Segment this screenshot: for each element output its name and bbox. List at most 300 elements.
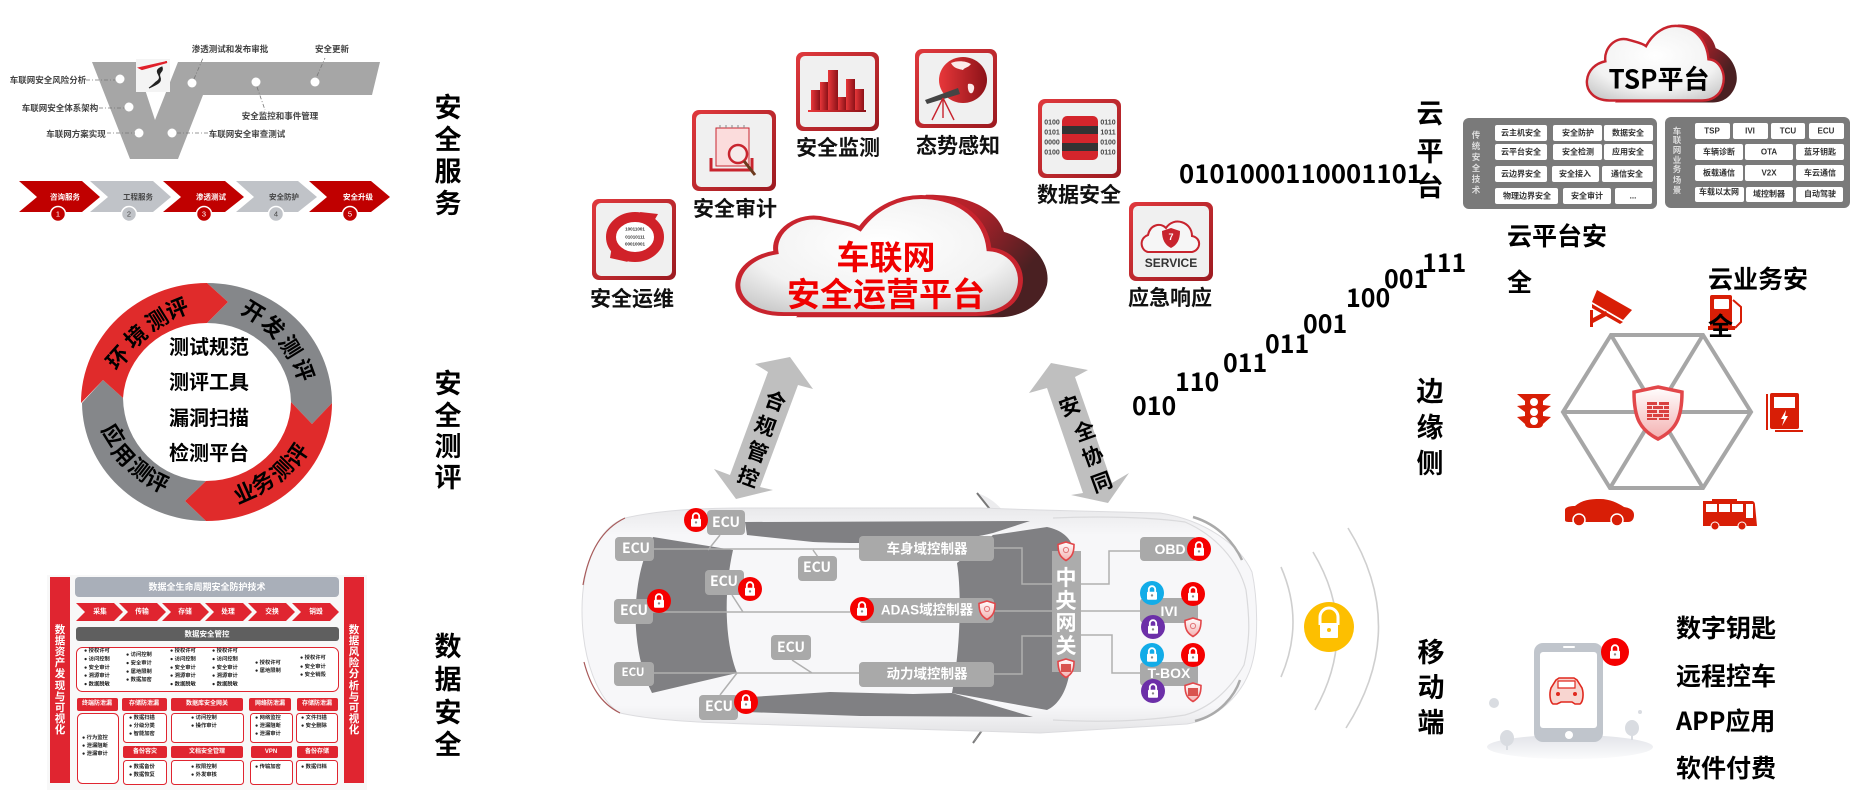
icon: database: 0100 <box>1044 120 1060 126</box>
icon: database <box>1044 116 1116 160</box>
arrow: 安全协同: 全 <box>1071 417 1099 446</box>
control list box: ● 数据加密 <box>126 675 153 683</box>
binary stream diagonal: 100 <box>1346 279 1390 315</box>
right column: 化 <box>349 723 360 736</box>
panel: 传统安全技术: 安全接入 <box>1559 168 1591 178</box>
left column: 数 <box>55 623 66 636</box>
icon: fuel pump <box>1708 295 1741 330</box>
left column: 据 <box>55 634 66 647</box>
testing ring <box>81 283 332 521</box>
ring label: 开发测评: 测 <box>274 331 306 363</box>
icon: charging station <box>1766 393 1803 432</box>
heading: 安全测评: 评 <box>434 463 462 493</box>
left column: 可 <box>55 702 65 714</box>
data security architecture panel <box>47 575 367 790</box>
heading: 边缘侧: 缘 <box>1416 413 1444 443</box>
heading: 数据安全: 据 <box>434 665 462 695</box>
label: 安全运维: 安全运维 <box>590 283 674 313</box>
control list box: ● 授权许可 <box>255 658 282 666</box>
right column: 分 <box>349 667 360 680</box>
right column: 析 <box>349 679 360 692</box>
ring label: 环境测评: 境 <box>119 320 153 354</box>
panel: 车联网业务场景: TCU <box>1780 126 1796 136</box>
ECU boxes: ECU <box>705 696 733 716</box>
top banner <box>75 577 339 597</box>
panel: 传统安全技术: 安全防护 <box>1562 128 1594 138</box>
panel: 车联网业务场景: ECU <box>1818 126 1835 136</box>
product headers: 备份存储 <box>305 747 329 755</box>
panel: 车联网业务场景: 景 <box>1673 185 1682 195</box>
icon: car <box>1565 499 1634 526</box>
binary stream diagonal: 010 <box>1132 387 1176 423</box>
hexagon lines <box>1563 335 1751 488</box>
V labels: 车联网安全审查测试 <box>209 129 286 139</box>
cloud title: 安全运营平台 <box>787 268 985 316</box>
panel: 车联网业务场景: 车载以太网 <box>1699 186 1739 196</box>
right column: 险 <box>349 656 360 669</box>
product detail boxes: ● 分级分类 <box>129 721 156 729</box>
product detail boxes: ● 外发审核 <box>191 770 218 778</box>
control list box: ● 授权许可 <box>170 646 197 654</box>
ring center text: 测试规范 <box>169 336 249 359</box>
panel: 车联网业务场景: 网 <box>1673 145 1681 155</box>
panel: 车联网业务场景: 车 <box>1673 126 1682 136</box>
service process chevrons: 3 <box>202 210 206 218</box>
icon: service cloud shield: SERVICE <box>1145 256 1197 270</box>
ring label: 环境测评: 环 <box>101 341 135 375</box>
ring label: 应用测评 <box>97 419 172 498</box>
product detail boxes <box>78 713 338 784</box>
panel: 传统安全技术: 安全审计 <box>1571 190 1603 200</box>
leader lines <box>86 58 325 133</box>
panel: 传统安全技术: 云主机安全 <box>1501 128 1541 138</box>
product headers: 备份容灾 <box>133 747 157 755</box>
panel: 传统安全技术: 全 <box>1472 163 1481 173</box>
control list box: ● 访问控制 <box>170 654 196 662</box>
panel: 车联网业务场景: 车云通信 <box>1804 168 1836 178</box>
tile: 态势感知 <box>915 49 997 128</box>
wireless arcs <box>1281 528 1379 728</box>
label: 应急响应: 应急响应 <box>1128 282 1212 312</box>
left column: 视 <box>55 712 66 725</box>
heading: 移动端: 移 <box>1418 638 1444 668</box>
ring center text <box>169 336 249 465</box>
control list box: ● 安全审计 <box>126 658 153 666</box>
binary stream diagonal: 001 <box>1303 305 1347 341</box>
icon: service cloud shield <box>1142 222 1199 270</box>
left column: 化 <box>55 723 66 736</box>
control list box: ● 访问控制 <box>84 654 110 662</box>
lifecycle chevrons: 交换 <box>265 606 279 616</box>
heading: 安全服务: 服 <box>434 157 462 187</box>
control list box: ● 安全审计 <box>212 663 239 671</box>
product detail boxes: ● 数据恢复 <box>129 770 156 778</box>
domain controllers: 车身域控制器 <box>886 540 968 556</box>
product detail boxes: ● 泄漏审计 <box>255 729 282 737</box>
right column: 与 <box>349 690 359 703</box>
lifecycle chevrons: 销毁 <box>309 606 323 616</box>
control list box: ● 溯源审计 <box>170 671 197 679</box>
product detail boxes: ● 访问控制 <box>191 713 217 721</box>
domain controllers <box>859 536 994 687</box>
panel: 车联网业务场景: 场 <box>1673 175 1682 185</box>
car windows <box>636 521 1077 717</box>
panel: 传统安全技术: 云平台安全 <box>1501 146 1541 156</box>
left column: 现 <box>55 680 66 692</box>
icon: car on screen <box>1550 678 1583 704</box>
icon: service cloud shield: 7 <box>1168 232 1174 242</box>
right column: 可 <box>349 702 359 714</box>
label: 态势感知: 态势感知 <box>916 130 1000 160</box>
tile: 安全运维 <box>592 199 676 280</box>
control list box: ● 属地限制 <box>126 667 152 675</box>
text: 云平台安全: 全 <box>1507 263 1532 299</box>
product headers: 存储防泄漏 <box>129 699 159 707</box>
heading: 安全测评: 安 <box>434 369 462 399</box>
heading: 数据安全: 全 <box>434 730 462 760</box>
V labels: 车联网方案实现 <box>46 129 106 139</box>
lifecycle chevrons: 存储 <box>178 606 192 616</box>
tile: 安全监测 <box>796 52 879 131</box>
binary stream diagonal: 001 <box>1384 260 1428 296</box>
panel: 车联网业务场景: IVI <box>1745 126 1755 136</box>
service process chevrons: 安全防护 <box>269 192 299 202</box>
heading: 安全服务: 安 <box>434 93 462 123</box>
binary stream top: 0101000110001101 <box>1179 155 1422 191</box>
lifecycle chevrons: 传输 <box>135 606 149 616</box>
control list box: ● 属地限制 <box>255 666 281 674</box>
control list box: ● 授权许可 <box>84 646 111 654</box>
arrow: 合规管控: 规 <box>751 413 779 441</box>
V shape <box>92 62 380 159</box>
icon: bar chart <box>808 70 866 112</box>
service process chevrons: 工程服务 <box>123 192 153 202</box>
heading: 安全服务: 全 <box>434 125 462 155</box>
arrow: 合规管控 <box>714 357 813 499</box>
arrow: 合规管控: 管 <box>743 439 771 467</box>
ring label: 开发测评: 评 <box>287 355 319 385</box>
ring label: 应用测评: 应 <box>97 419 129 451</box>
OBD IVI T-BOX: IVI <box>1160 603 1178 619</box>
V dots <box>116 74 320 138</box>
ECU boxes: ECU <box>777 637 805 657</box>
label: 安全审计: 安全审计 <box>693 193 777 223</box>
control list box: ● 访问控制 <box>212 654 238 662</box>
panel: 车联网业务场景: 板载通信 <box>1703 168 1735 178</box>
yellow lock <box>1304 602 1354 652</box>
arrow: 合规管控: 控 <box>734 464 762 492</box>
control list box: ● 安全审计 <box>300 662 327 670</box>
panel: 传统安全技术: 物理边界安全 <box>1503 190 1551 200</box>
product headers: 终端防泄漏 <box>82 699 112 707</box>
tile: 安全审计 <box>692 110 776 191</box>
management bar: 数据安全管控 <box>184 628 230 638</box>
product headers: VPN <box>265 749 277 755</box>
ring label: 业务测评: 业 <box>230 477 260 509</box>
central gateway: 关 <box>1056 634 1076 658</box>
panel: 车联网业务场景: OTA <box>1761 148 1777 156</box>
panel: 车联网业务场景: V2X <box>1761 168 1777 178</box>
top banner: 数据全生命周期安全防护技术 <box>148 581 266 592</box>
logo <box>136 59 170 92</box>
icon: database: 0101 <box>1044 130 1060 136</box>
ring label: 环境测评: 评 <box>162 293 192 325</box>
icon: database: 0000 <box>1044 140 1060 146</box>
icon: traffic light <box>1517 394 1551 428</box>
V labels <box>10 44 349 139</box>
heading: 安全测评: 全 <box>434 401 462 431</box>
icon: rotating data ring: 10011001 <box>625 226 645 232</box>
panel: 传统安全技术: ... <box>1630 192 1636 200</box>
ring label: 环境测评: 测 <box>141 304 173 336</box>
control list box: ● 溯源审计 <box>212 671 239 679</box>
service process chevrons: 4 <box>274 210 278 218</box>
panel: 车联网业务场景 <box>1665 117 1850 208</box>
lifecycle chevrons: 采集 <box>93 606 107 616</box>
product headers: 存储防泄漏 <box>302 699 332 707</box>
panel: 传统安全技术: 应用安全 <box>1612 146 1644 156</box>
OBD IVI T-BOX <box>1140 537 1198 686</box>
product headers: 网络防泄漏 <box>255 699 285 707</box>
control list box: ● 数据脱敏 <box>84 680 111 688</box>
icon: database: 0110 <box>1100 120 1116 126</box>
control list box: ● 访问控制 <box>126 650 152 658</box>
ECU boxes <box>614 510 837 720</box>
panel: 车联网业务场景: 联 <box>1673 135 1682 145</box>
product detail boxes: ● 传输加密 <box>255 762 282 770</box>
car diagram <box>582 493 1257 743</box>
V labels: 车联网安全体系架构 <box>22 103 99 113</box>
panel: 车联网业务场景: TSP <box>1704 126 1720 136</box>
arrow: 合规管控: 合 <box>761 388 789 416</box>
right column: 风 <box>349 646 360 658</box>
control list box <box>76 646 338 692</box>
ECU boxes: ECU <box>712 512 740 532</box>
lifecycle chevrons <box>76 603 339 621</box>
ring label: 业务测评 <box>230 439 314 509</box>
ring label: 开发测评: 开 <box>237 296 269 328</box>
mobile features list: APP应用 <box>1675 702 1775 738</box>
panel: 车联网业务场景: 务 <box>1673 164 1682 174</box>
ECU boxes: ECU <box>803 557 831 577</box>
ring label: 业务测评: 评 <box>280 439 314 471</box>
TSP cloud: TSP平台 <box>1609 60 1709 96</box>
control list box: ● 安全审计 <box>170 663 197 671</box>
lock badges <box>647 508 1211 714</box>
ring center text: 漏洞扫描 <box>169 407 249 430</box>
icon: rotating data ring: 01010111 <box>625 234 645 240</box>
edge hexagon diagram <box>1517 290 1803 530</box>
arrow: 安全协同 <box>1029 363 1129 503</box>
car body <box>582 493 1257 743</box>
mobile features list <box>1675 609 1776 785</box>
ECU boxes: ECU <box>622 664 644 680</box>
ring center text: 检测平台 <box>169 441 249 465</box>
phone <box>1534 643 1603 742</box>
ring label: 开发测评 <box>237 296 319 385</box>
icon: database: 1011 <box>1100 130 1116 136</box>
center shield <box>1634 387 1682 439</box>
heading: 数据安全: 数 <box>434 632 462 662</box>
service process chevrons: 咨询服务 <box>50 192 80 202</box>
product detail boxes: ● 泄漏阻断 <box>82 741 109 749</box>
control list box: ● 数据脱敏 <box>212 680 239 688</box>
ECU boxes: ECU <box>620 600 648 620</box>
heading: 数据安全: 安 <box>434 698 462 728</box>
heading: 安全服务: 务 <box>434 189 462 219</box>
ground <box>1487 735 1653 759</box>
heading: 云平台: 台 <box>1416 171 1444 202</box>
central gateway <box>1052 551 1081 672</box>
product detail boxes: ● 智能加密 <box>129 729 156 737</box>
product headers: 数据库安全网关 <box>186 699 228 707</box>
ECU boxes: ECU <box>710 571 738 591</box>
service process chevrons: 1 <box>56 210 60 218</box>
panel: 传统安全技术: 通信安全 <box>1611 168 1643 178</box>
binary stream diagonal <box>1132 244 1466 423</box>
text: 云业务安全: 全 <box>1708 307 1733 343</box>
panel: 传统安全技术 <box>1463 118 1657 209</box>
icon: camera <box>1590 290 1632 327</box>
control list box: ● 安全审计 <box>84 663 111 671</box>
service process chevrons <box>19 181 390 222</box>
service process chevrons: 渗透测试 <box>196 192 226 202</box>
domain controllers: 动力域控制器 <box>886 666 968 682</box>
left column: 与 <box>55 690 65 703</box>
heading: 移动端: 动 <box>1418 673 1444 703</box>
icon: globe and telescope <box>925 57 987 120</box>
panel: 传统安全技术: 安全检测 <box>1562 146 1594 156</box>
V labels: 安全监控和事件管理 <box>242 111 319 121</box>
product detail boxes: ● 行为监控 <box>82 733 109 741</box>
panel: 车联网业务场景: 业 <box>1673 155 1682 165</box>
product headers <box>77 698 338 758</box>
product detail boxes: ● 泄漏阻断 <box>255 721 282 729</box>
domain controllers: ADAS域控制器 <box>881 602 974 618</box>
tile: 应急响应 <box>1129 202 1213 281</box>
panel: 车联网业务场景: 域控制器 <box>1753 188 1785 198</box>
panel: 传统安全技术: 技 <box>1472 174 1481 184</box>
panel: 车联网业务场景: 自动驾驶 <box>1804 188 1836 198</box>
control list box: ● 数据脱敏 <box>170 680 197 688</box>
panel: 传统安全技术: 数据安全 <box>1612 128 1644 138</box>
product detail boxes: ● 数据备份 <box>129 762 156 770</box>
icon: rotating data ring <box>610 212 659 262</box>
ECU boxes: ECU <box>622 538 650 558</box>
mobile illustration <box>1487 638 1653 759</box>
product detail boxes: ● 操作审计 <box>191 721 218 729</box>
product detail boxes: ● 数据扫描 <box>129 713 156 721</box>
binary stream diagonal: 111 <box>1422 244 1466 280</box>
left column: 产 <box>55 656 65 669</box>
icon: bus <box>1703 499 1757 530</box>
arrow: 安全协同: 同 <box>1088 469 1116 497</box>
V labels: 车联网安全风险分析 <box>10 75 87 85</box>
ring label: 业务测评: 务 <box>247 466 279 500</box>
panel: 传统安全技术: 云边界安全 <box>1501 168 1541 178</box>
mobile features list: 数字钥匙 <box>1676 609 1776 645</box>
mobile features list: 软件付费 <box>1676 749 1776 785</box>
OBD IVI T-BOX: OBD <box>1154 541 1186 557</box>
TSP cloud <box>1587 24 1737 102</box>
panel: 车联网业务场景: 车辆诊断 <box>1703 146 1735 156</box>
control list box: ● 溯源审计 <box>84 671 111 679</box>
central gateway: 中 <box>1056 566 1076 590</box>
shield badges <box>979 542 1201 702</box>
central gateway: 网 <box>1056 612 1076 634</box>
panel: 车联网业务场景: 蓝牙钥匙 <box>1804 146 1836 156</box>
heading: 边缘侧: 边 <box>1416 377 1444 407</box>
icon: rotating data ring: 00010001 <box>625 242 646 246</box>
V labels: 安全更新 <box>315 44 349 54</box>
panel: 传统安全技术: 安 <box>1472 152 1481 162</box>
ring label: 应用测评: 用 <box>106 438 140 472</box>
ring label: 业务测评: 测 <box>265 453 299 487</box>
arrow: 安全协同: 协 <box>1079 443 1107 471</box>
ring label: 开发测评: 发 <box>256 310 290 344</box>
label: 安全监测: 安全监测 <box>796 132 880 162</box>
main cloud <box>738 195 1048 317</box>
left column: 发 <box>55 667 66 680</box>
V labels: 渗透测试和发布审批 <box>192 44 269 54</box>
lifecycle chevrons: 处理 <box>221 606 235 616</box>
left column <box>50 577 70 783</box>
ring label: 环境测评 <box>101 293 192 375</box>
text: 云平台安全: 云平台安 <box>1507 217 1607 253</box>
right column <box>344 577 364 783</box>
left column: 资 <box>55 646 66 658</box>
cloud title <box>787 231 985 316</box>
control list box: ● 授权许可 <box>300 653 327 661</box>
product detail boxes: ● 网络监控 <box>255 713 282 721</box>
service process chevrons: 安全升级 <box>343 192 373 202</box>
binary stream diagonal: 011 <box>1223 344 1267 380</box>
icon: database: 0100 <box>1100 140 1116 146</box>
ring label: 应用测评: 测 <box>124 453 156 487</box>
control list box: ● 授权许可 <box>212 646 239 654</box>
ring label: 应用测评: 评 <box>142 466 172 498</box>
icon: audit notebook <box>711 125 755 175</box>
product detail boxes: ● 安全删除 <box>301 721 328 729</box>
label: 数据安全: 数据安全 <box>1037 179 1121 209</box>
heading: 云平台: 云 <box>1416 99 1444 129</box>
ring center text: 测评工具 <box>169 371 249 394</box>
V model diagram <box>10 44 380 159</box>
product headers: 文档安全管理 <box>189 747 225 755</box>
management bar <box>76 627 339 641</box>
product detail boxes: ● 泄漏审计 <box>82 749 109 757</box>
text: 云平台安全 <box>1507 217 1607 299</box>
central gateway: 央 <box>1056 590 1076 612</box>
service process chevrons: 2 <box>127 210 131 218</box>
tile: 数据安全 <box>1038 99 1121 178</box>
right column: 据 <box>349 634 360 647</box>
lock badge <box>1601 638 1629 666</box>
text: 云业务安全 <box>1708 260 1808 343</box>
icon: database: 0110 <box>1100 150 1116 156</box>
heading: 移动端: 端 <box>1418 708 1444 738</box>
right column: 视 <box>349 712 360 725</box>
cloud title: 车联网 <box>836 231 936 279</box>
trees <box>1489 698 1642 750</box>
binary stream diagonal: 011 <box>1265 325 1309 361</box>
product detail boxes: ● 数据归档 <box>301 762 328 770</box>
panel: 传统安全技术: 术 <box>1472 185 1481 195</box>
product detail boxes: ● 文件扫描 <box>301 713 328 721</box>
wiring <box>653 535 1140 695</box>
panel: 传统安全技术: 统 <box>1472 141 1481 151</box>
panel: 传统安全技术: 传 <box>1472 130 1481 140</box>
